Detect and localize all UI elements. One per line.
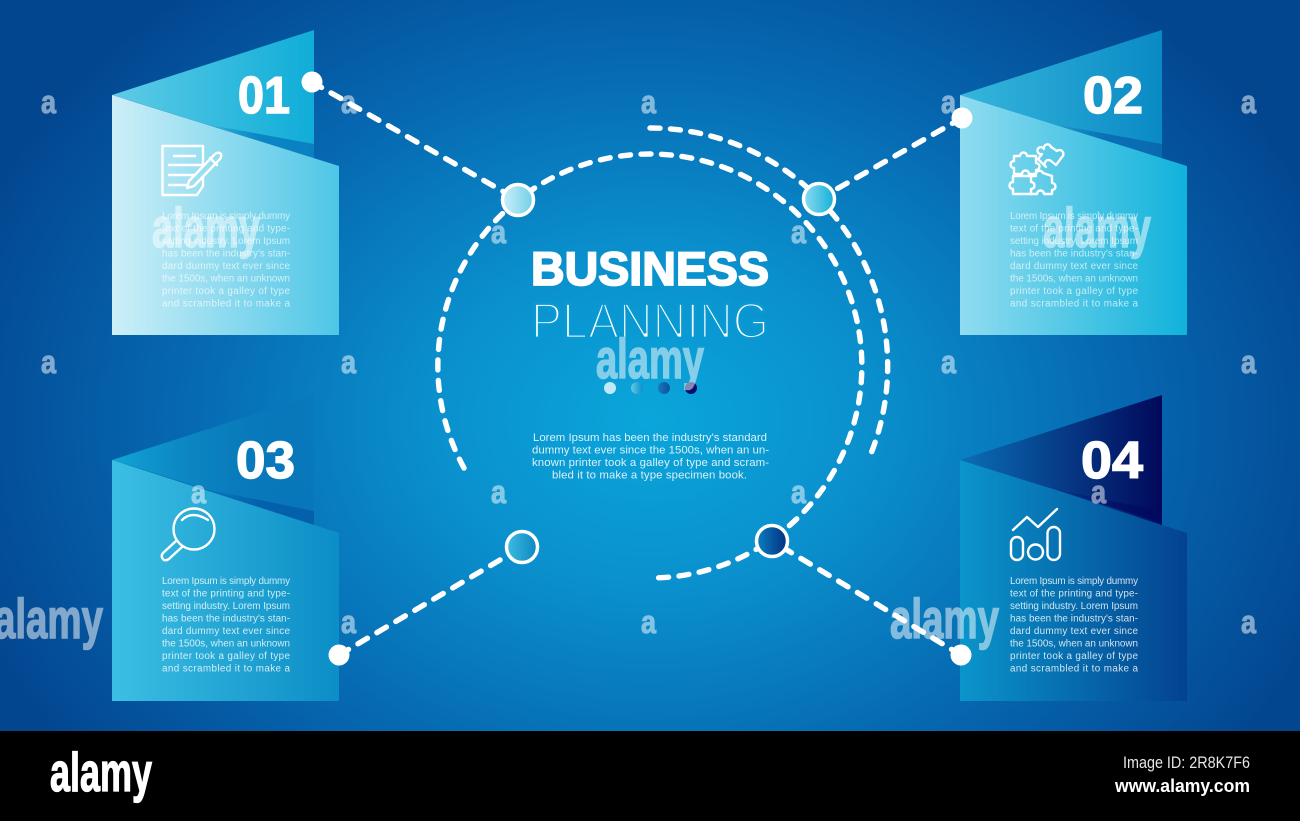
text block 03: setting industry. Lorem Ipsum: [162, 601, 290, 612]
text block 01: printer took a galley of type: [162, 286, 290, 297]
website: www.alamy.com: [1114, 776, 1250, 796]
text block 04: dard dummy text ever since: [1010, 626, 1138, 637]
text block 02: [1010, 211, 1138, 310]
text block 01: dard dummy text ever since: [162, 261, 290, 272]
watermark overlay: [0, 84, 1256, 650]
text block 03: [162, 576, 290, 674]
text block 02: printer took a galley of type: [1010, 286, 1138, 297]
number 01: 01: [238, 67, 290, 125]
text block 04: text of the printing and type-: [1010, 588, 1138, 600]
text block 04: [1010, 576, 1138, 674]
text block 02: Lorem Ipsum is simply dummy: [1010, 211, 1138, 222]
text block 02: text of the printing and type-: [1010, 224, 1138, 234]
dashed ring: [438, 128, 888, 578]
text block 03: the 1500s, when an unknown: [162, 638, 290, 650]
number 03: 03: [236, 432, 295, 490]
watermark overlay: a: [491, 214, 506, 250]
watermark overlay: a: [341, 604, 356, 640]
text block 02: setting industry. Lorem Ipsum: [1010, 236, 1138, 247]
text block 03: has been the industry's stan-: [162, 614, 290, 624]
title: business: BUSINESS: [531, 242, 769, 295]
watermark overlay: a: [41, 344, 56, 380]
node: top left: [502, 184, 534, 216]
watermark overlay: a: [341, 344, 356, 380]
text block 02: has been the industry's stan-: [1010, 248, 1138, 260]
watermark overlay: a: [941, 344, 956, 380]
text block 04: Lorem Ipsum is simply dummy: [1010, 576, 1138, 587]
watermark overlay: a: [791, 474, 806, 510]
node: bottom left: [506, 532, 538, 562]
text block 04: printer took a galley of type: [1010, 651, 1138, 662]
pagination dots: [604, 382, 697, 394]
text block 03: dard dummy text ever since: [162, 626, 290, 637]
watermark overlay: a: [1241, 84, 1256, 120]
end dot 01: [302, 72, 322, 92]
footer logo: alamy: [50, 741, 152, 803]
text block 03: and scrambled it to make a: [162, 664, 290, 674]
text block 02: and scrambled it to make a: [1010, 298, 1138, 310]
end dot 03: [328, 644, 350, 666]
watermark overlay: a: [791, 214, 806, 250]
watermark overlay: a: [491, 474, 506, 510]
watermark overlay: a: [641, 84, 656, 120]
end dot 04: [950, 644, 972, 666]
text block 01: the 1500s, when an unknown: [162, 274, 290, 284]
title: planning: PLANNING: [531, 293, 769, 349]
icon: puzzle pieces: [1010, 144, 1063, 194]
watermark overlay: alamy: [596, 327, 704, 390]
icon: magnifier: [162, 508, 214, 560]
text block 01: setting industry. Lorem Ipsum: [162, 236, 290, 247]
watermark overlay: a: [941, 84, 956, 120]
text block 04: setting industry. Lorem Ipsum: [1010, 601, 1138, 612]
text block 01: has been the industry's stan-: [162, 248, 290, 260]
panel 02: [960, 30, 1187, 335]
watermark overlay: alamy: [1043, 196, 1151, 259]
center text block: [532, 432, 769, 482]
text block 04: has been the industry's stan-: [1010, 614, 1138, 624]
footer bar: [0, 731, 1300, 821]
watermark overlay: a: [1241, 604, 1256, 640]
text block 01: text of the printing and type-: [162, 224, 290, 234]
text block 02: the 1500s, when an unknown: [1010, 274, 1138, 284]
watermark overlay: a: [641, 604, 656, 640]
image id: Image ID: 2R8K7F6: [1123, 753, 1250, 772]
center text block: bled it to make a type specimen book.: [552, 470, 747, 482]
text block 04: and scrambled it to make a: [1010, 664, 1138, 674]
watermark overlay: a: [41, 84, 56, 120]
text block 03: printer took a galley of type: [162, 651, 290, 662]
icon: document and pen: [162, 146, 221, 195]
center text block: known printer took a galley of type and scram-: [532, 457, 769, 469]
watermark overlay: alamy: [152, 196, 260, 259]
panel 03: [112, 395, 339, 701]
text block 02: dard dummy text ever since: [1010, 261, 1138, 272]
number 02: 02: [1083, 67, 1143, 125]
center text block: dummy text ever since the 1500s, when an un-: [532, 444, 769, 456]
text block 03: Lorem Ipsum is simply dummy: [162, 576, 290, 587]
node: bottom right: [756, 526, 788, 556]
watermark overlay: a: [191, 474, 206, 510]
text block 04: the 1500s, when an unknown: [1010, 638, 1138, 650]
panel 04: [960, 395, 1187, 701]
end dot 02: [952, 108, 972, 128]
text block 03: text of the printing and type-: [162, 588, 290, 600]
watermark overlay: a: [1091, 474, 1106, 510]
center text block: Lorem Ipsum has been the industry's standard: [533, 432, 767, 444]
number 04: 04: [1081, 432, 1143, 490]
watermark overlay: alamy: [890, 587, 999, 650]
node: top right: [804, 184, 834, 214]
watermark overlay: a: [1241, 344, 1256, 380]
text block 01: and scrambled it to make a: [162, 298, 290, 310]
panel 01: [112, 30, 339, 335]
icon: growth chart: [1011, 509, 1060, 560]
text block 01: [162, 211, 290, 310]
watermark overlay: a: [341, 84, 356, 120]
dashed connectors: [312, 82, 962, 655]
text block 01: Lorem Ipsum is simply dummy: [162, 211, 290, 222]
